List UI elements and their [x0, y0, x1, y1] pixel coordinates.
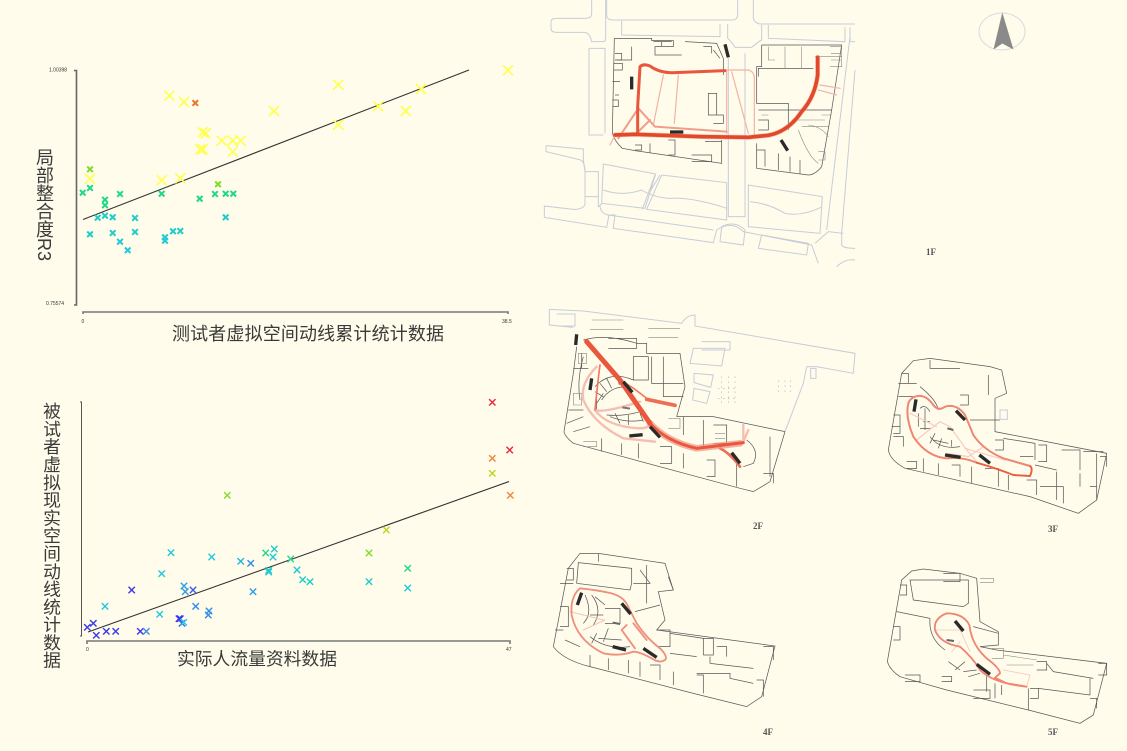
- x axis tick labels: [82, 319, 512, 325]
- elevators: [947, 621, 990, 674]
- x axis: [83, 312, 508, 314]
- floor plan 2F: [549, 309, 855, 492]
- large yellow markers: [85, 65, 513, 185]
- x axis tick labels: 38.5: [502, 319, 512, 325]
- red movement traces: [570, 588, 666, 662]
- y axis title: 局部整合度R3: [34, 148, 54, 261]
- elevators: [576, 334, 740, 463]
- y axis tick labels: [46, 68, 67, 307]
- walls: [549, 309, 855, 492]
- small markers: [80, 100, 236, 253]
- elevators: [914, 399, 990, 463]
- y axis title: 被试者虚拟现实空间动线统计数据: [41, 402, 61, 669]
- x axis title: 测试者虚拟空间动线累计统计数据: [172, 324, 444, 344]
- label 3F: 3F: [1048, 524, 1058, 534]
- label 2F: 2F: [753, 521, 764, 531]
- elevators: [577, 593, 657, 657]
- floor plan 5F: [887, 569, 1107, 723]
- scatter chart: virtual path data vs local integration: [34, 65, 513, 344]
- trend line: [83, 70, 469, 220]
- y axis tick labels: 0.75574: [46, 301, 64, 307]
- red movement traces: [907, 396, 1032, 476]
- y axis: [80, 402, 82, 636]
- markers: [84, 399, 514, 638]
- red movement traces: [935, 613, 1030, 687]
- red movement traces: [610, 57, 840, 145]
- trend line: [88, 482, 509, 632]
- walls: [888, 358, 1107, 513]
- icon: north arrow: [979, 12, 1025, 50]
- surrounding roads: [544, 0, 855, 267]
- scatter chart: real pedestrian flow vs virtual path data: [41, 399, 514, 669]
- elevators: [632, 44, 788, 151]
- y axis: [74, 70, 76, 305]
- x axis title: 实际人流量资料数据: [177, 649, 337, 669]
- label 4F: 4F: [763, 727, 774, 737]
- x axis tick labels: 47: [506, 647, 512, 653]
- floor plan 3F: [888, 358, 1107, 513]
- floor plan 1F: [544, 0, 855, 267]
- red movement traces: [583, 342, 748, 467]
- x axis: [87, 641, 510, 644]
- x axis tick labels: 0: [86, 647, 89, 653]
- building walls: [612, 38, 842, 175]
- label 1F: 1F: [926, 247, 936, 257]
- walls: [553, 553, 775, 707]
- walls: [887, 569, 1107, 723]
- x axis tick labels: 0: [82, 319, 84, 325]
- label 5F: 5F: [1048, 727, 1058, 737]
- floor plan 4F: [553, 553, 775, 707]
- y axis tick labels: 1.00398: [49, 68, 67, 74]
- x axis tick labels: [86, 647, 512, 653]
